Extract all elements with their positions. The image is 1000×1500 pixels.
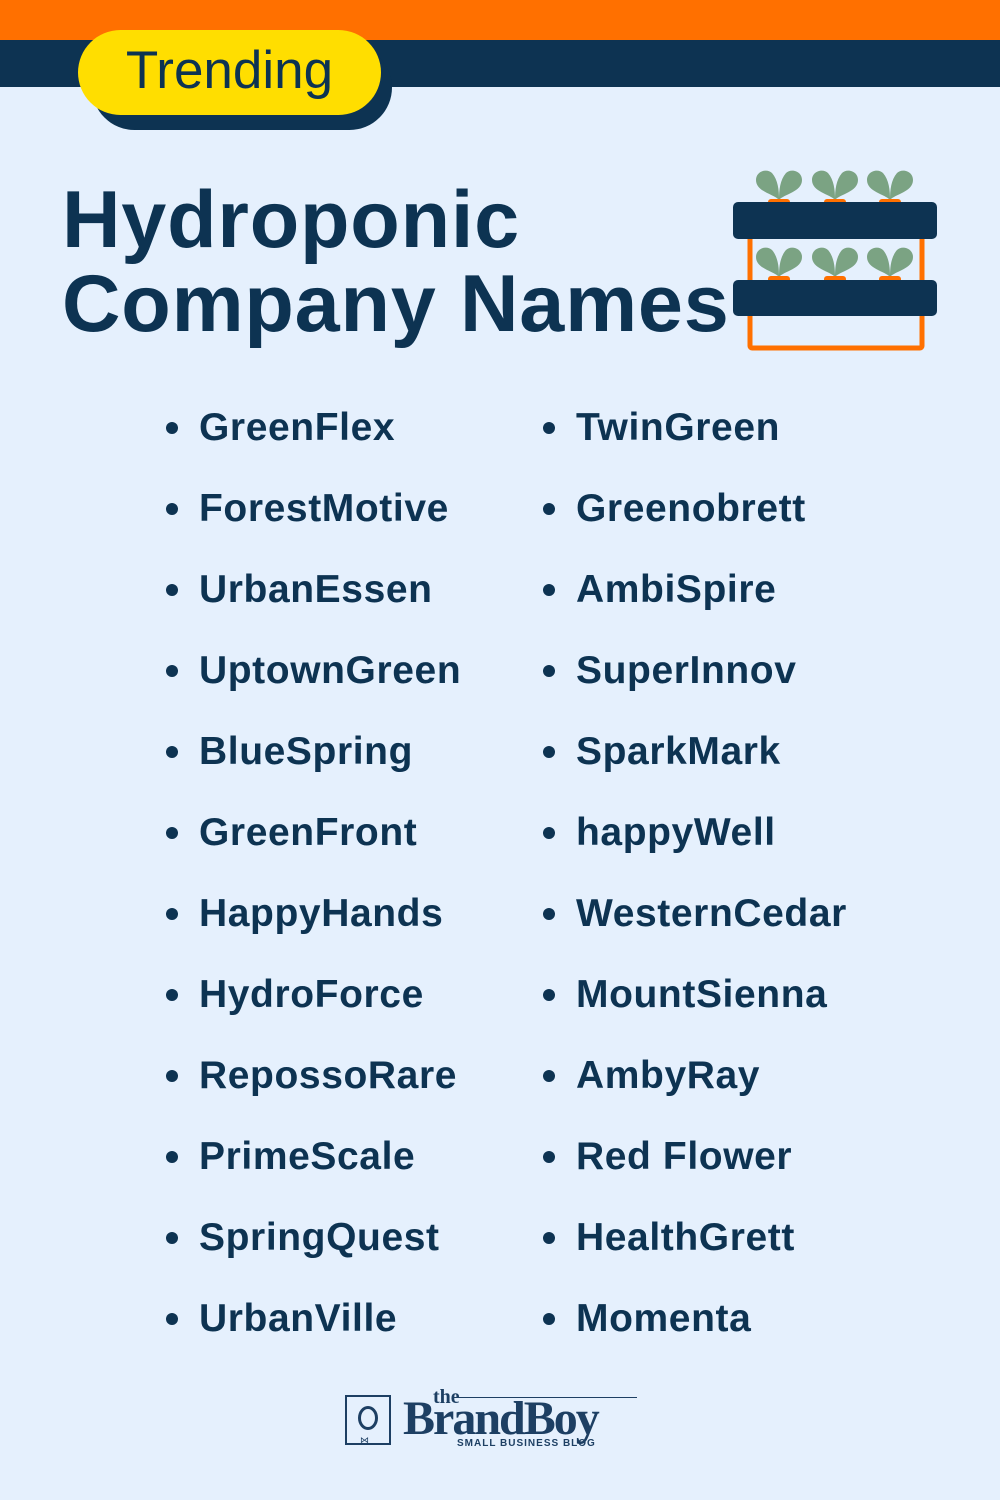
list: left column: BlueSpring bbox=[199, 730, 413, 773]
list: left column: UrbanVille bbox=[199, 1297, 397, 1340]
list: right column: WesternCedar bbox=[576, 892, 847, 935]
logo: the BrandBoy: SMALL BUSINESS BLOG bbox=[457, 1438, 596, 1449]
list: right column: MountSienna bbox=[576, 973, 827, 1016]
list: right column: Momenta bbox=[576, 1297, 751, 1340]
list: left column bbox=[166, 406, 461, 1340]
list: left column: SpringQuest bbox=[199, 1216, 440, 1259]
badge: Trending bbox=[78, 30, 392, 130]
list: left column: ForestMotive bbox=[199, 487, 449, 530]
list: left column: GreenFront bbox=[199, 811, 417, 854]
title: Company Names bbox=[62, 259, 730, 349]
list: right column: Red Flower bbox=[576, 1135, 792, 1178]
list: left column: UptownGreen bbox=[199, 649, 461, 692]
list: right column: SuperInnov bbox=[576, 649, 797, 692]
list: right column: AmbiSpire bbox=[576, 568, 776, 611]
list: left column: HydroForce bbox=[199, 973, 424, 1016]
list: left column: UrbanEssen bbox=[199, 568, 433, 611]
title: Hydroponic bbox=[62, 175, 520, 265]
list: left column: PrimeScale bbox=[199, 1135, 415, 1178]
list: right column: TwinGreen bbox=[576, 406, 780, 449]
icon: boy face: ⋈ bbox=[360, 1435, 369, 1445]
logo: the BrandBoy bbox=[345, 1386, 637, 1449]
list: right column: SparkMark bbox=[576, 730, 781, 773]
list: right column: Greenobrett bbox=[576, 487, 806, 530]
orange top bar bbox=[0, 0, 1000, 40]
icon: boy face bbox=[345, 1395, 391, 1445]
icon: hydroponic shelf bbox=[733, 170, 937, 350]
logo: the BrandBoy: the bbox=[433, 1386, 460, 1408]
list: left column: GreenFlex bbox=[199, 406, 395, 449]
list: left column: HappyHands bbox=[199, 892, 443, 935]
list: right column: happyWell bbox=[576, 811, 776, 854]
logo: the BrandBoy: BrandBoy bbox=[403, 1392, 598, 1445]
list: right column bbox=[543, 406, 847, 1340]
navy band bbox=[0, 40, 1000, 87]
badge: Trending: Trending bbox=[126, 41, 333, 100]
list: right column: HealthGrett bbox=[576, 1216, 795, 1259]
list: left column: RepossoRare bbox=[199, 1054, 457, 1097]
title bbox=[62, 175, 730, 349]
list: right column: AmbyRay bbox=[576, 1054, 760, 1097]
